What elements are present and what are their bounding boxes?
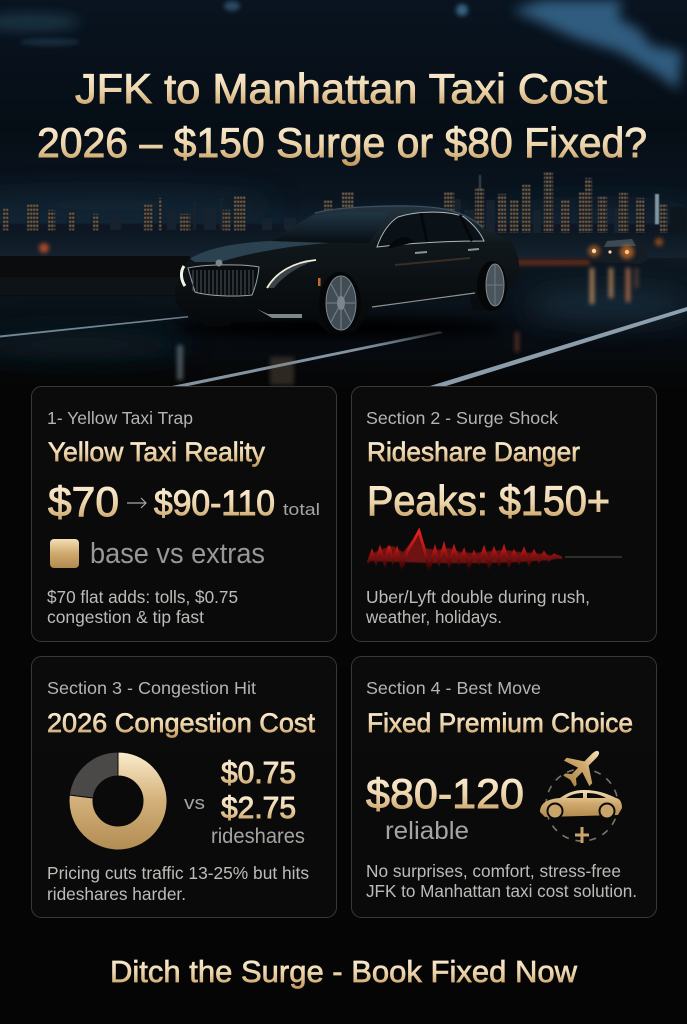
body reflections — [395, 258, 470, 265]
panel: surge shock: weather, holidays. — [365, 607, 502, 627]
front wheel — [319, 272, 361, 334]
surge waveform — [368, 531, 622, 570]
panel: best move: reliable — [385, 817, 469, 845]
road lane markings — [0, 307, 687, 386]
fee comparison: $2.75 — [221, 790, 296, 825]
panel: best move: No surprises, comfort, stress-free — [366, 861, 621, 881]
distant car with orange lights — [588, 238, 663, 264]
panel: surge shock: Rideshare Danger — [367, 437, 580, 467]
lower door trim and handles — [372, 293, 475, 307]
panel: congestion hit: Section 3 - Congestion Hit — [47, 678, 256, 698]
panel: best move: JFK to Manhattan taxi cost solution. — [366, 881, 637, 901]
price change from base to total: $90-110 — [154, 484, 275, 523]
wet road — [0, 256, 687, 398]
windshield — [272, 212, 388, 243]
fee comparison: $0.75 — [221, 755, 296, 790]
grille — [188, 260, 259, 296]
panel: yellow taxi trap: base vs extras — [90, 538, 265, 570]
panel: congestion hit: 2026 Congestion Cost — [47, 708, 315, 738]
title: JFK to Manhattan Taxi Cost — [75, 65, 607, 112]
front bumper trim — [257, 309, 302, 318]
fee comparison: vs — [184, 793, 205, 813]
water band — [0, 233, 687, 258]
icon: plane and car in dashed circle — [540, 739, 622, 843]
title — [37, 65, 647, 166]
price change from base to total: total — [283, 500, 320, 519]
panel: best move: Fixed Premium Choice — [367, 708, 633, 738]
panel: best move: $80-120 — [366, 770, 524, 817]
panel: best move — [352, 656, 656, 918]
roof edge highlight — [315, 206, 483, 228]
panel: congestion hit: Pricing cuts traffic 13-25% but hits — [47, 863, 309, 883]
panel: best move: Section 4 - Best Move — [366, 678, 541, 698]
panel: surge shock — [352, 386, 656, 642]
panel: congestion hit: rideshares harder. — [47, 884, 186, 904]
panel: surge shock: Uber/Lyft double during rush, — [366, 587, 590, 607]
light reflections on the road — [177, 268, 638, 385]
donut chart — [69, 752, 167, 850]
panel: yellow taxi trap: 1- Yellow Taxi Trap — [47, 408, 193, 428]
fee comparison: rideshares — [211, 825, 305, 848]
panel: yellow taxi trap: congestion & tip fast — [47, 607, 204, 627]
call to action: Ditch the Surge - Book Fixed Now — [110, 954, 578, 989]
panel: congestion hit — [32, 656, 336, 918]
black limousine — [175, 206, 519, 338]
hood highlight — [190, 241, 330, 262]
legend swatch — [50, 539, 79, 568]
side windows with chrome trim — [377, 212, 484, 247]
car body — [175, 206, 519, 334]
night sky with clouds — [0, 0, 687, 235]
panel: yellow taxi trap: Yellow Taxi Reality — [48, 437, 265, 467]
rear wheel — [477, 261, 507, 311]
panel: yellow taxi trap — [32, 386, 336, 642]
price change from base to total — [48, 478, 320, 525]
panel: surge shock: Peaks: $150+ — [367, 477, 610, 524]
panel: yellow taxi trap: $70 flat adds: tolls, $0.75 — [47, 587, 238, 607]
panel: surge shock: Section 2 - Surge Shock — [366, 408, 558, 428]
hero scene: night sky, skyline and wet road — [0, 0, 687, 400]
fee comparison — [184, 755, 305, 848]
price change from base to total: $70 — [48, 478, 119, 525]
city skyline — [0, 172, 687, 247]
headlights — [181, 260, 320, 288]
title: 2026 – $150 Surge or $80 Fixed? — [37, 119, 647, 166]
side mirror — [388, 237, 413, 249]
